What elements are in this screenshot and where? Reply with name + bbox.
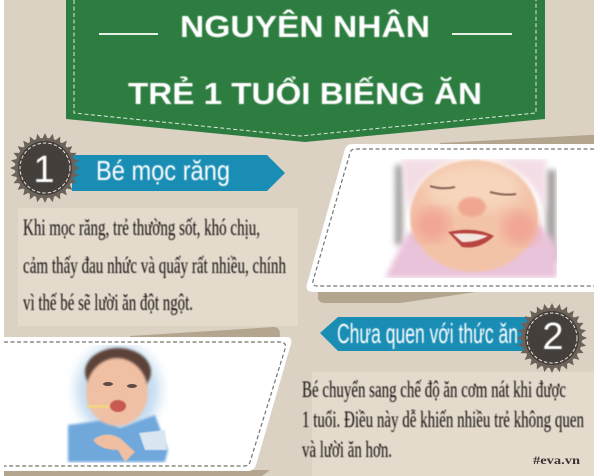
badge 1 number: 1 (33, 149, 55, 191)
card 1 shadow strips (318, 135, 594, 303)
badge 1 (6, 127, 87, 210)
section 1 text: Khi mọc răng, trẻ thường sốt, khó chịu, (23, 215, 260, 240)
ribbon 2 (320, 317, 530, 351)
section 1 text: cảm thấy đau nhức và quấy rất nhiều, chính (23, 253, 286, 278)
title rule right (452, 33, 512, 35)
body text backing: section 2 (312, 372, 594, 476)
photo: crying baby (68, 344, 168, 462)
photo: laughing baby (385, 158, 557, 278)
body text backing: section 1 (18, 208, 298, 326)
ribbon 1 (72, 155, 285, 191)
photo card 1 (307, 144, 594, 292)
section 1 text (23, 215, 286, 315)
badge 2 (513, 297, 594, 380)
source credit: #eva.vn (533, 453, 580, 467)
ribbon 1 label: Bé mọc răng (96, 155, 230, 186)
title rule left (99, 33, 158, 35)
badge 2 number: 2 (542, 316, 564, 358)
card 2 shadow strips (4, 327, 280, 476)
section 2 text (302, 377, 584, 462)
title line 2: TRẺ 1 TUỔI BIẾNG ĂN (128, 75, 482, 111)
photo card 2 (4, 337, 291, 471)
section 1 text: vì thế bé sẽ lười ăn đột ngột. (23, 290, 193, 315)
title line 1: NGUYÊN NHÂN (180, 8, 430, 44)
section 2 text: và lười ăn hơn. (302, 437, 392, 462)
title banner (66, 0, 545, 142)
